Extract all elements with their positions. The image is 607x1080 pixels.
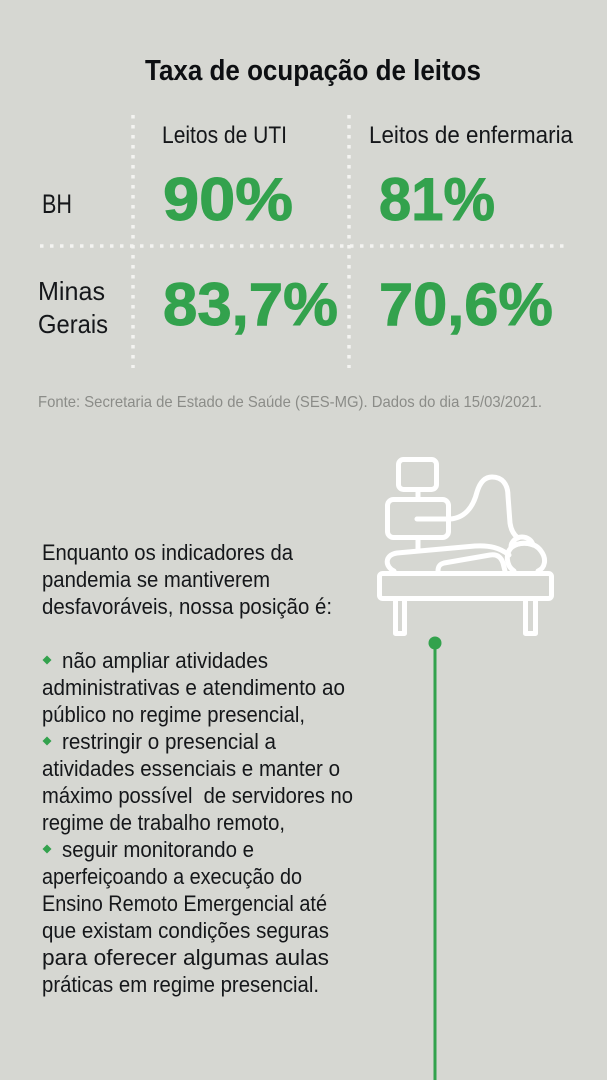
column heading: ward beds: Leitos de enfermaria: [369, 122, 574, 149]
row label: BH: BH: [42, 189, 72, 219]
text block: position statement: [42, 540, 353, 997]
text block: position statement: Enquanto os indicadores da: [42, 540, 294, 565]
text block: position statement: seguir monitorando e: [62, 837, 254, 862]
bullet 3: [42, 844, 52, 854]
text block: position statement: público no regime presencial,: [42, 702, 305, 727]
text block: position statement: administrativas e atendimento ao: [42, 675, 345, 700]
row label: Minas Gerais: [38, 276, 108, 339]
icon: hospital bed with patient: [380, 460, 552, 634]
table: occupancy rates: [38, 122, 574, 339]
text block: position statement: Ensino Remoto Emergencial até: [42, 891, 327, 916]
text block: position statement: desfavoráveis, nossa posição é:: [42, 594, 332, 619]
value: BH ICU: 90%: [163, 166, 293, 233]
row label: Minas Gerais: Gerais: [38, 309, 108, 339]
text block: position statement: máximo possível de servidores no: [42, 783, 353, 808]
bullet 1: [42, 656, 52, 664]
text block: position statement: práticas em regime presencial.: [42, 972, 319, 997]
text block: position statement: que existam condições seguras: [42, 918, 329, 943]
text block: position statement: regime de trabalho remoto,: [42, 810, 285, 835]
green timeline line: [428, 636, 442, 1080]
row label: Minas Gerais: Minas: [38, 276, 105, 306]
text block: position statement: atividades essenciais e manter o: [42, 756, 340, 781]
source note: Fonte: Secretaria de Estado de Saúde (SES-MG). Dados do dia 15/03/2021.: [38, 394, 542, 411]
text block: position statement: pandemia se mantiverem: [42, 567, 270, 592]
text block: position statement: aperfeiçoando a execução do: [42, 864, 302, 889]
column heading: ICU beds: Leitos de UTI: [162, 122, 287, 149]
text block: position statement: não ampliar atividades: [62, 648, 268, 673]
value: Minas Gerais ward: 70,6%: [379, 271, 553, 338]
value: BH ward: 81%: [379, 166, 495, 233]
value: Minas Gerais ICU: 83,7%: [163, 271, 338, 338]
bullet 2: [42, 736, 52, 746]
text block: position statement: restringir o presencial a: [62, 729, 277, 754]
title: Taxa de ocupação de leitos: [145, 55, 481, 87]
text block: position statement: para oferecer algumas aulas: [42, 945, 329, 970]
